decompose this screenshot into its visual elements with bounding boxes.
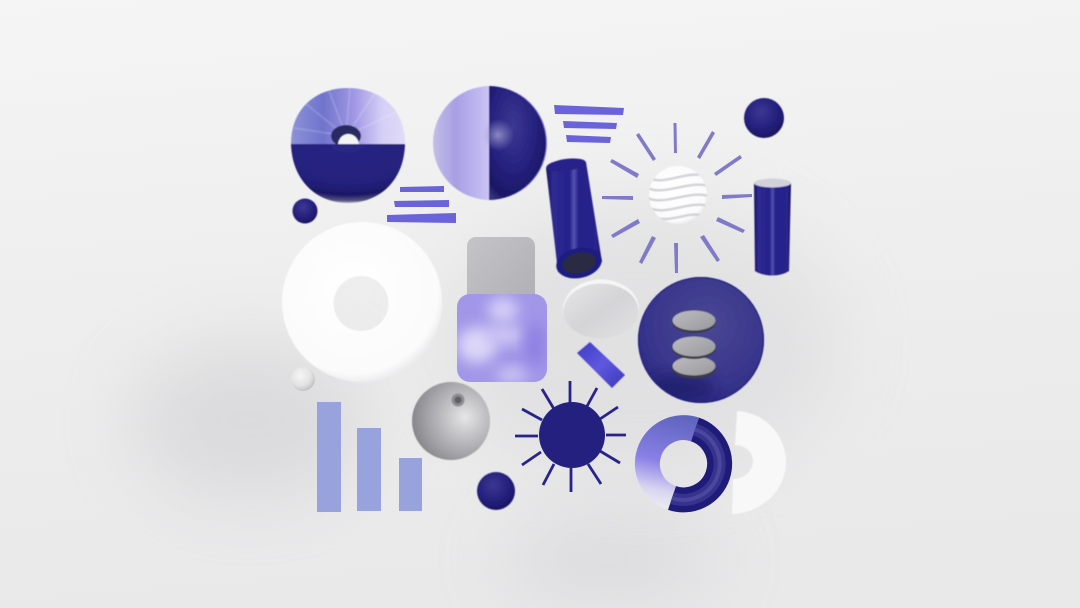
upright navy cylinder xyxy=(754,178,791,276)
white donut disc xyxy=(282,222,442,382)
illustration: abstract 3D shapes xyxy=(0,0,810,608)
grey rounded square xyxy=(467,237,535,307)
stacked bars left xyxy=(387,186,456,223)
stacked bars top xyxy=(554,105,624,143)
white half disc xyxy=(732,411,786,514)
light grey disc xyxy=(563,280,639,338)
split sphere xyxy=(433,86,547,200)
small navy sphere top right xyxy=(744,98,784,138)
chrome sphere xyxy=(412,382,490,460)
small white sphere xyxy=(291,367,315,391)
torus ring xyxy=(647,428,720,500)
white twisted sphere xyxy=(648,166,708,224)
tilted navy cylinder xyxy=(545,156,605,282)
bar chart xyxy=(317,402,422,512)
sun rays light xyxy=(602,123,752,273)
small navy sphere left xyxy=(292,198,318,224)
lilac rounded square xyxy=(457,294,547,383)
navy sun with rays xyxy=(515,381,626,492)
small navy sphere bottom xyxy=(477,472,515,510)
navy plate with coins xyxy=(638,277,764,403)
small blue cuboid xyxy=(577,342,625,388)
ribbed half sphere with bowl xyxy=(291,86,405,203)
